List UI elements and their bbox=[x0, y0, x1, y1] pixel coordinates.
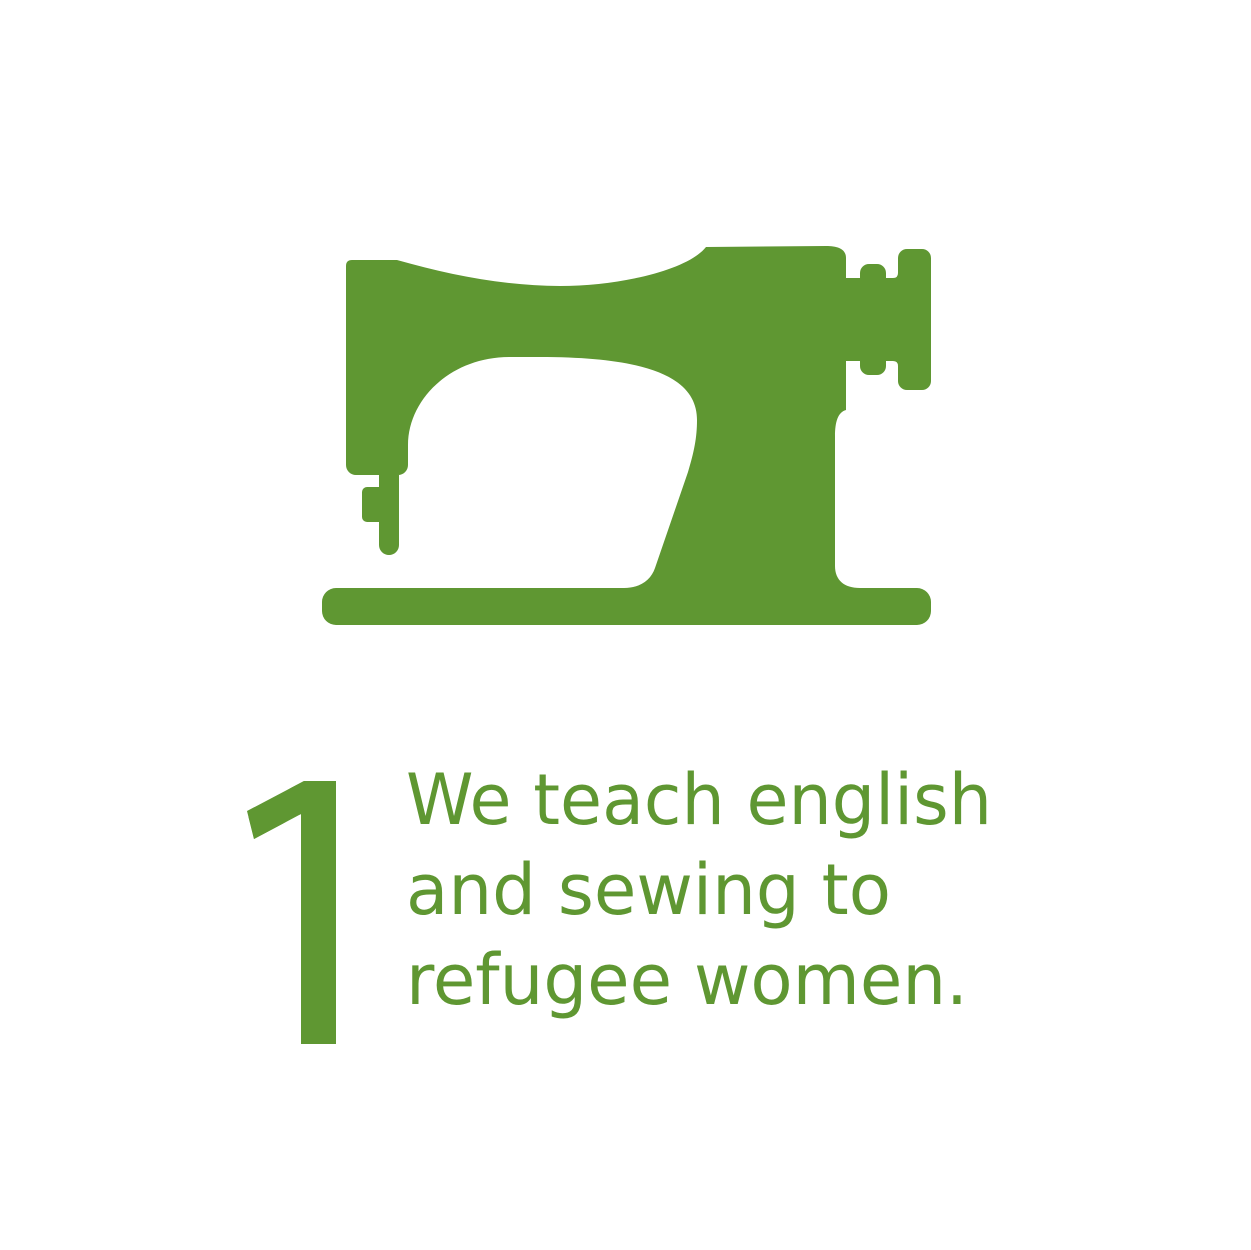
line 1: We teach english bbox=[406, 759, 992, 841]
icon: sewing machine bbox=[322, 246, 931, 625]
text block: description bbox=[406, 759, 992, 1021]
line 2: and sewing to bbox=[406, 849, 891, 931]
numeral 1: 1 bbox=[203, 697, 417, 1126]
infographic bbox=[247, 246, 986, 1044]
line 3: refugee women. bbox=[406, 939, 968, 1021]
